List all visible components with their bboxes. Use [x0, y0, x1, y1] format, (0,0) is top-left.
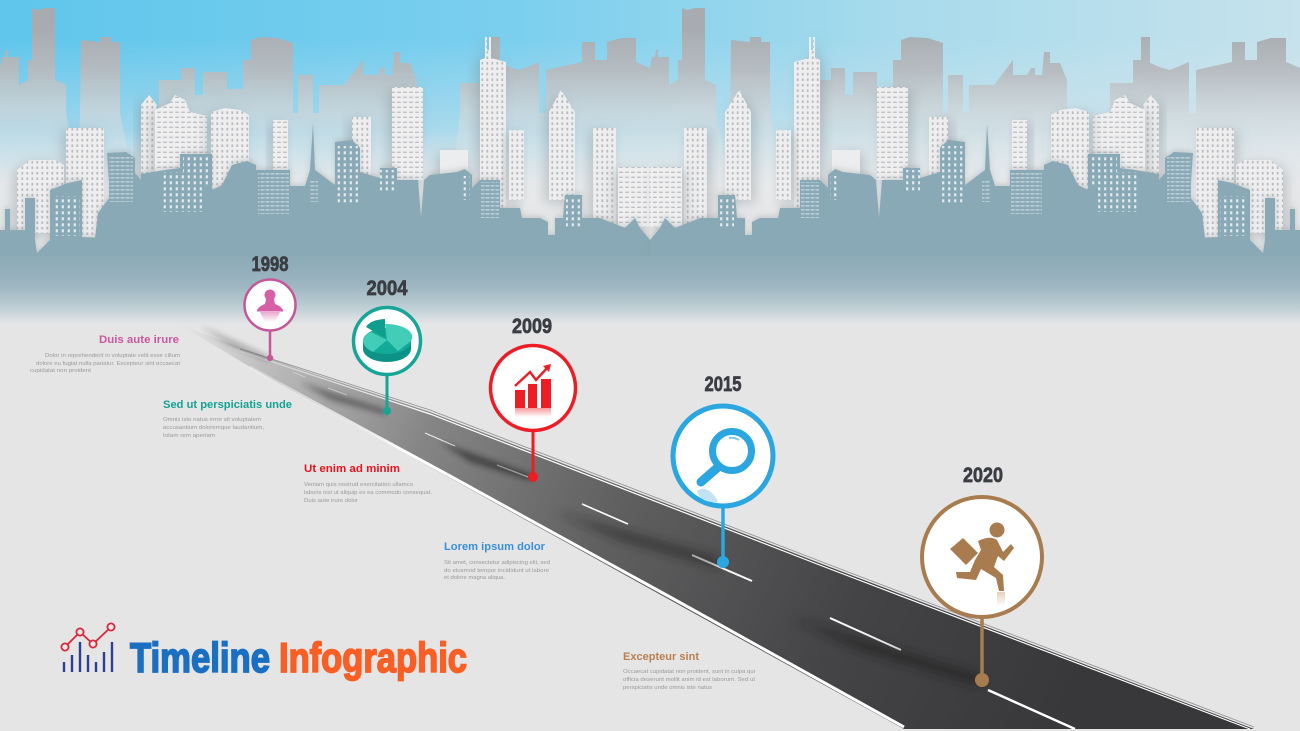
- text block: Excepteur sint: [623, 651, 755, 691]
- text block: Ut enim ad minim: Veniam quis nostrud exercitation ullamco: [304, 482, 413, 488]
- title: [130, 634, 467, 681]
- fog band below the skyline: [0, 255, 1300, 324]
- text block: Lorem ipsum dolor: et dolore magna aliqua.: [444, 575, 505, 581]
- milestone 1998: [244, 253, 296, 361]
- icon: magnifying glass: [697, 432, 752, 502]
- text block: Duis aute irure: [30, 334, 180, 374]
- milestone 2015: [673, 373, 773, 568]
- road surface: [180, 325, 1254, 729]
- text block: Excepteur sint: Excepteur sint: [623, 651, 699, 663]
- text block: Sed ut perspiciatis unde: Omnis iste natus error sit voluptatem: [163, 417, 261, 423]
- year: 2015: [704, 373, 742, 396]
- text block: Ut enim ad minim: Duis aute irure dolor: [304, 498, 358, 504]
- text block: Duis aute irure: Duis aute irure: [99, 334, 179, 346]
- icon: chart logo: [61, 623, 115, 672]
- year: 2020: [963, 464, 1003, 487]
- road edge lines: [230, 348, 1250, 729]
- year: 2004: [366, 277, 408, 300]
- icon: pie chart: [363, 319, 412, 362]
- pin: [673, 406, 773, 568]
- pin: [922, 497, 1042, 687]
- pin: [490, 346, 576, 482]
- milestone 2020: [922, 464, 1042, 687]
- lane dashes: [293, 372, 1075, 729]
- text block: Excepteur sint: perspiciatis unde omnis iste natus: [623, 685, 712, 691]
- text block: Sed ut perspiciatis unde: Sed ut perspiciatis unde: [163, 399, 292, 411]
- text block: Ut enim ad minim: [304, 463, 432, 504]
- pin: [354, 308, 420, 415]
- pin: [244, 280, 296, 361]
- text block: Lorem ipsum dolor: Sit amet, consectetur adipiscing elit, sed: [444, 560, 550, 566]
- icon: running businessman: [950, 522, 1014, 606]
- text block: Ut enim ad minim: Ut enim ad minim: [304, 463, 400, 475]
- year: 1998: [252, 253, 289, 276]
- text block: Lorem ipsum dolor: [444, 541, 550, 581]
- icon: stamp: [257, 290, 283, 322]
- skyline: white and teal paper-cut buildings: [0, 37, 1300, 260]
- sky: [0, 0, 1300, 260]
- text block: Lorem ipsum dolor: do eiusmod tempor incididunt ut labore: [444, 568, 549, 574]
- text block: Excepteur sint: officia deserunt mollit anim id est laborum. Sed ut: [623, 677, 755, 683]
- text block: Duis aute irure: dolore eu fugiat nulla pariatur. Excepteur sint occaecat: [36, 361, 180, 367]
- text block: Lorem ipsum dolor: Lorem ipsum dolor: [444, 541, 546, 553]
- milestone 2004: [354, 277, 420, 415]
- text block: Ut enim ad minim: laboris nisi ut aliquip ex ea commodo consequat.: [304, 490, 432, 496]
- year: 2009: [512, 315, 552, 338]
- text block: Sed ut perspiciatis unde: accusantium doloremque laudantium,: [163, 425, 264, 431]
- text block: Sed ut perspiciatis unde: [163, 399, 292, 439]
- icon: rising bar chart: [515, 364, 551, 417]
- title: Timeline: [130, 634, 270, 681]
- text block: Excepteur sint: Occaecat cupidatat non proident, sunt in culpa qui: [623, 669, 755, 675]
- text block: Duis aute irure: cupidatat non proident: [30, 368, 91, 374]
- milestone 2009: [490, 315, 576, 482]
- text block: Duis aute irure: Dolor in reprehenderit in voluptate velit esse cillum: [45, 353, 180, 359]
- text block: Sed ut perspiciatis unde: totam rem aperiam: [163, 433, 215, 439]
- title: Infographic: [279, 634, 467, 681]
- skyline: grey back silhouette: [0, 8, 1300, 180]
- cast shadows of the pins: [200, 326, 980, 686]
- road: [180, 325, 1254, 729]
